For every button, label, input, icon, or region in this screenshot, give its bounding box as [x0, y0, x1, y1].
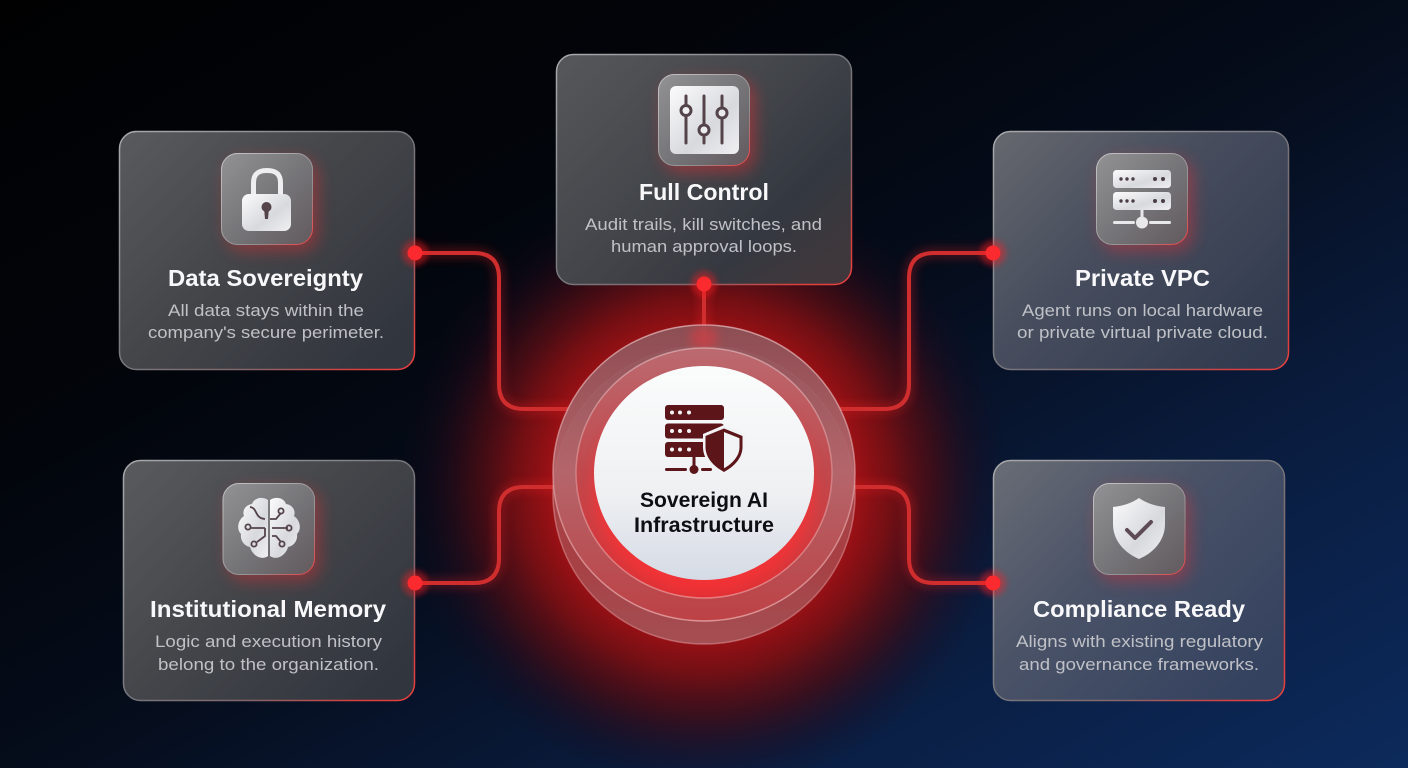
icon: server network [1096, 154, 1193, 251]
hub title: Sovereign AI [640, 489, 768, 512]
panel: compliance ready [994, 460, 1284, 700]
description: Agent runs on local hardware [1022, 301, 1263, 320]
description [1017, 301, 1268, 342]
heading: Data Sovereignty [168, 265, 363, 291]
description: company's secure perimeter. [148, 323, 384, 342]
panel: data sovereignty [120, 132, 414, 370]
description [148, 301, 384, 342]
heading: Full Control [639, 179, 769, 205]
description: or private virtual private cloud. [1017, 323, 1268, 342]
description: belong to the organization. [158, 655, 379, 674]
description: All data stays within the [168, 301, 364, 320]
panel: full control [556, 54, 852, 284]
description: Aligns with existing regulatory [1016, 632, 1264, 651]
description [155, 632, 383, 674]
hub title [634, 489, 774, 537]
heading: Institutional Memory [150, 596, 386, 622]
icon: brain circuit [223, 484, 320, 581]
description: Logic and execution history [155, 632, 383, 651]
description: and governance frameworks. [1019, 655, 1259, 674]
description [1016, 632, 1264, 674]
connectors [415, 253, 993, 583]
icon: shield check [1094, 484, 1190, 581]
icon: padlock [222, 154, 318, 251]
central hub [553, 325, 855, 644]
heading: Compliance Ready [1033, 596, 1245, 622]
description: human approval loops. [611, 237, 797, 256]
icon: sliders [658, 74, 755, 172]
hub: white disc [594, 366, 814, 580]
icon: server with shield [665, 405, 745, 474]
connector nodes [402, 240, 1006, 596]
hub title: Infrastructure [634, 514, 774, 537]
heading: Private VPC [1075, 265, 1210, 291]
hub: glass rings [553, 325, 855, 644]
description [585, 215, 822, 256]
description: Audit trails, kill switches, and [585, 215, 822, 234]
panel: institutional memory [124, 460, 414, 700]
panel: private vpc [994, 132, 1288, 370]
